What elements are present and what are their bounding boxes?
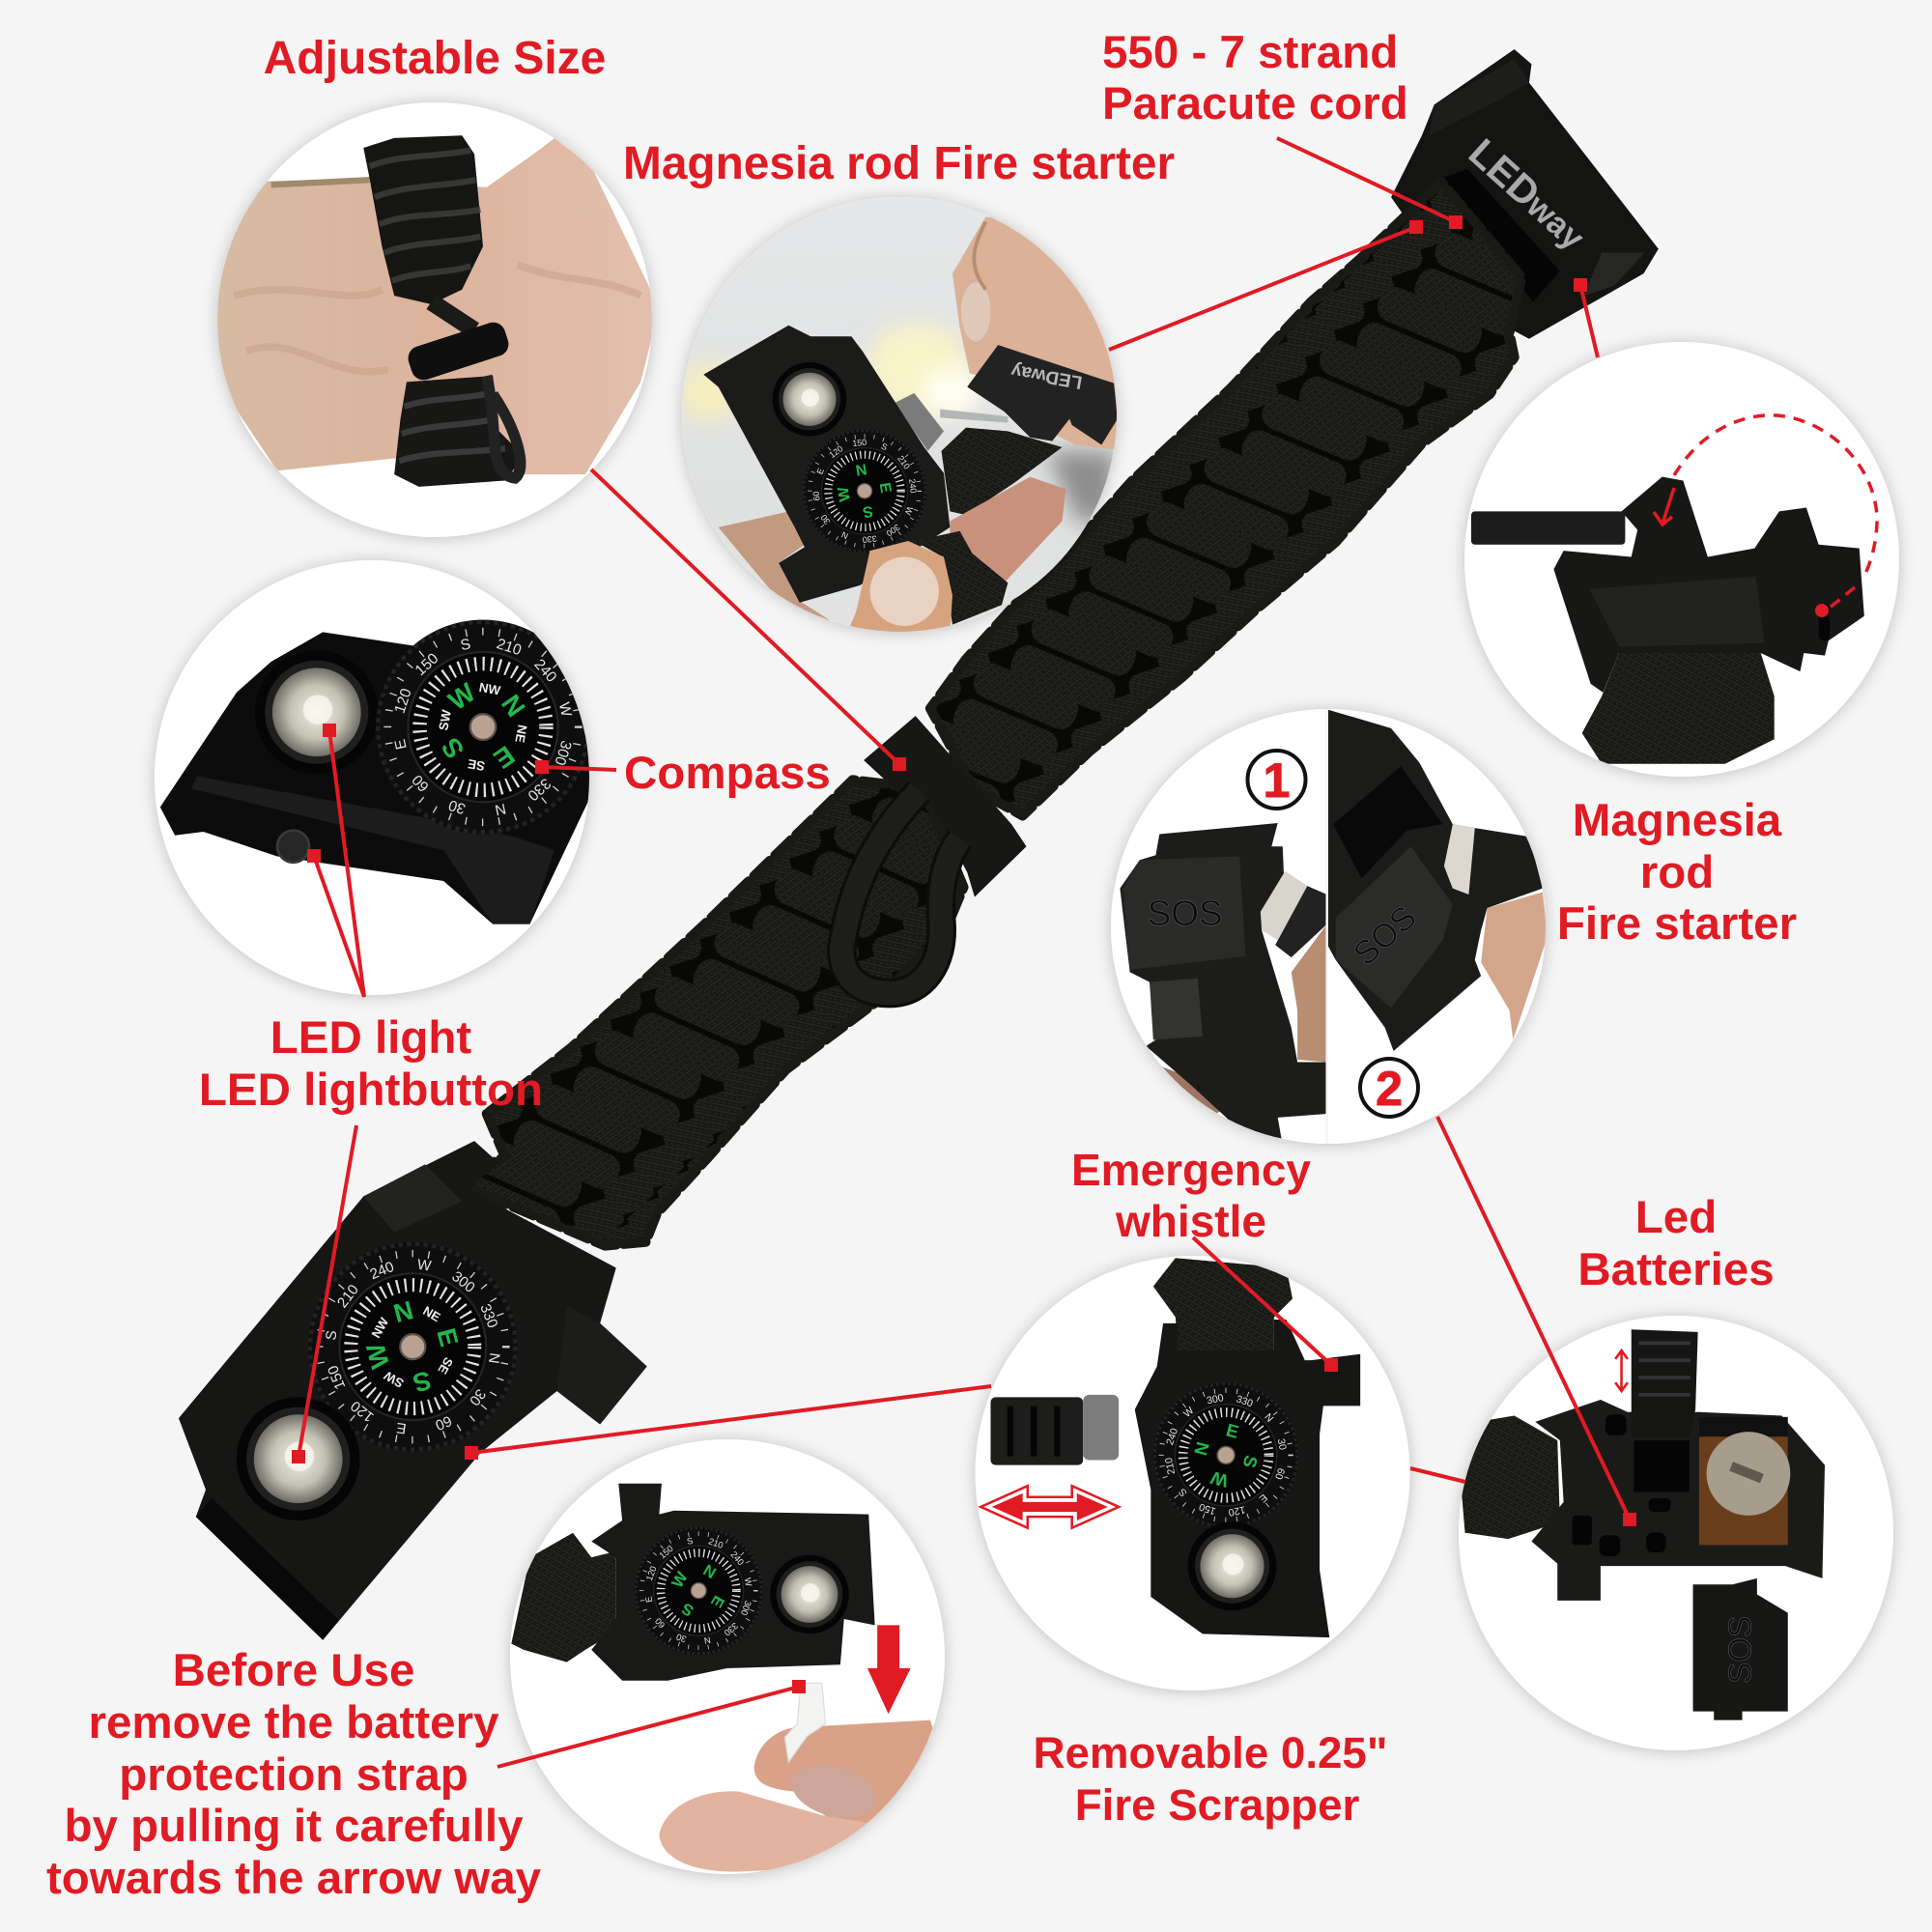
label: LED light: LED light bbox=[270, 1012, 471, 1064]
compass: E bbox=[643, 1596, 654, 1604]
panel: fire starter in use: S bbox=[880, 441, 889, 452]
leader: top buckle to fire starter panel bbox=[1574, 278, 1598, 357]
device body bbox=[591, 1484, 875, 1681]
label: emergency whistle: whistle bbox=[1115, 1196, 1266, 1246]
label: before use instructions: by pulling it carefully bbox=[64, 1801, 524, 1852]
label: before use instructions: protection strap bbox=[119, 1749, 469, 1801]
compass: 30 bbox=[675, 1632, 688, 1644]
label: adjustable size: Adjustable Size bbox=[264, 33, 606, 84]
leader: adjustable size to clasp bbox=[591, 469, 906, 771]
protection strap bbox=[784, 1683, 826, 1762]
label: magnesia rod fire starter (right): rod bbox=[1640, 847, 1714, 898]
panel: fire starter in use: E bbox=[876, 481, 894, 495]
compass: 210 bbox=[334, 1282, 362, 1311]
compass: NE bbox=[512, 724, 529, 744]
label: magnesia rod fire starter (right): Fire starter bbox=[1557, 898, 1797, 950]
leader: SOS panel to battery panel bbox=[1437, 1117, 1636, 1526]
compass: 300 bbox=[1206, 1392, 1225, 1406]
cord bbox=[1582, 653, 1775, 764]
mounting holes bbox=[1573, 1414, 1671, 1556]
compass: S bbox=[1177, 1486, 1190, 1498]
divider bbox=[1325, 702, 1328, 1146]
connector between panels bbox=[1410, 1468, 1465, 1482]
compass: W bbox=[743, 1577, 753, 1587]
panel: fire starter in use: 120 bbox=[828, 443, 844, 460]
wrist and hand bbox=[210, 138, 659, 474]
leader: paracord strand bbox=[1277, 138, 1463, 229]
upper fingers bbox=[952, 216, 1127, 451]
step 1 device bbox=[1120, 823, 1327, 1139]
compass: 120 bbox=[1227, 1503, 1246, 1519]
red vertical arrow bbox=[1615, 1350, 1628, 1391]
panel: magnesia rod fire starter bbox=[1464, 342, 1899, 777]
compass: N bbox=[485, 1351, 502, 1365]
compass: 240 bbox=[530, 656, 560, 686]
device body bbox=[1553, 477, 1864, 693]
step 2 hand bbox=[1481, 892, 1548, 1040]
panel: fire starter in use: 300 bbox=[885, 522, 901, 538]
compass: 240 bbox=[368, 1259, 396, 1283]
compass: 60 bbox=[653, 1616, 667, 1630]
cord bbox=[1462, 1416, 1560, 1539]
red down arrow bbox=[867, 1625, 911, 1714]
compass: E bbox=[707, 1593, 728, 1611]
label: compass: Compass bbox=[624, 748, 831, 799]
compass: E bbox=[395, 1419, 408, 1436]
grey knob bbox=[895, 393, 944, 451]
step 1 hand bbox=[1292, 924, 1327, 1062]
removable scrapper bbox=[991, 1395, 1119, 1465]
compass bbox=[308, 1242, 518, 1452]
device body bbox=[1531, 1400, 1825, 1601]
compass: N bbox=[1190, 1439, 1213, 1458]
step 2 device bbox=[1328, 710, 1543, 1051]
badge: step 1 bbox=[1248, 751, 1306, 809]
panel: fire starter in use: N bbox=[840, 529, 850, 541]
device bbox=[703, 326, 950, 603]
leader: LED on compass buckle bbox=[292, 1125, 356, 1463]
compass: W bbox=[416, 1257, 433, 1275]
compass: 120 bbox=[644, 1565, 659, 1582]
panel: LED light and compass close-up bbox=[155, 560, 592, 995]
compass: W bbox=[359, 1340, 395, 1372]
LED lens bbox=[265, 661, 369, 763]
compass: 330 bbox=[1235, 1393, 1255, 1409]
power button bbox=[277, 831, 309, 863]
compass: 300 bbox=[739, 1600, 753, 1616]
panel: fire starter in use: W bbox=[835, 485, 854, 502]
device body bbox=[1135, 1320, 1360, 1637]
compass: W bbox=[668, 1568, 692, 1591]
compass: N bbox=[1262, 1411, 1275, 1425]
striker: LEDway bbox=[1009, 359, 1084, 392]
compass: 300 bbox=[551, 738, 574, 768]
top buckle with LEDway logo bbox=[1391, 49, 1659, 339]
compass: N bbox=[700, 1561, 720, 1582]
compass: N bbox=[390, 1294, 416, 1328]
sparks bbox=[676, 362, 741, 421]
compass: NW bbox=[368, 1315, 392, 1341]
compass: 210 bbox=[495, 636, 524, 659]
label: paracord: Paracute cord bbox=[1102, 78, 1408, 129]
compass: S bbox=[678, 1599, 696, 1620]
label: LED light: LED lightbutton bbox=[199, 1065, 543, 1116]
compass: E bbox=[489, 740, 520, 775]
panel: fire starter in use: W bbox=[902, 505, 915, 517]
red double arrow bbox=[980, 1486, 1119, 1528]
battery compartment bbox=[1699, 1417, 1790, 1545]
SOS cover: SOS bbox=[1722, 1616, 1758, 1684]
label: paracord: 550 - 7 strand bbox=[1102, 27, 1398, 78]
label: removable fire scrapper: Fire Scrapper bbox=[1075, 1780, 1359, 1830]
lower cord bbox=[914, 531, 1008, 625]
LED bbox=[770, 1555, 849, 1634]
compass: E bbox=[431, 1325, 465, 1350]
rod bbox=[1471, 511, 1625, 545]
compass: 120 bbox=[348, 1397, 377, 1425]
compass: SW bbox=[381, 1368, 407, 1391]
upper cord section bbox=[930, 183, 1521, 815]
compass bbox=[1138, 1367, 1314, 1544]
compass: 210 bbox=[707, 1536, 724, 1550]
label: before use instructions: Before Use bbox=[173, 1645, 414, 1696]
panel: fire starter in use: S bbox=[862, 502, 874, 520]
compass: 30 bbox=[466, 1385, 489, 1408]
compass: 120 bbox=[392, 686, 415, 716]
compass: 240 bbox=[728, 1549, 746, 1567]
compass: S bbox=[459, 636, 472, 654]
panel: fire starter in use: N bbox=[855, 462, 868, 480]
leader: magnesia rod to cord bbox=[1109, 220, 1423, 350]
compass: S bbox=[686, 1536, 694, 1547]
compass: 30 bbox=[1275, 1437, 1289, 1451]
SOS cover bbox=[1693, 1578, 1788, 1720]
panel: fire starter in use bbox=[676, 197, 1127, 635]
panel: SOS whistle cover steps bbox=[1111, 702, 1548, 1146]
compass: S bbox=[436, 732, 470, 764]
compass: E bbox=[1224, 1419, 1241, 1442]
compass: 330 bbox=[476, 1301, 500, 1330]
compass: 150 bbox=[325, 1363, 349, 1392]
step 1 device: SOS bbox=[1148, 894, 1223, 933]
compass: E bbox=[1257, 1492, 1269, 1504]
compass: 60 bbox=[433, 1412, 454, 1434]
panel: fire starter in use: 330 bbox=[862, 533, 877, 545]
shadow under striker bbox=[1046, 451, 1115, 524]
dashed rotation arrow bbox=[1654, 415, 1877, 617]
compass: N bbox=[703, 1634, 711, 1645]
compass: 60 bbox=[409, 771, 433, 795]
label: LED batteries: Led bbox=[1635, 1192, 1717, 1243]
leader: buckle to scrapper panel bbox=[465, 1386, 991, 1460]
panel: fire starter in use: 240 bbox=[907, 478, 919, 494]
compass: SE bbox=[435, 1354, 456, 1377]
compass: NW bbox=[478, 680, 502, 698]
main paracord bracelet bbox=[179, 49, 1659, 1640]
badge: step 2 bbox=[1360, 1059, 1418, 1117]
cord bbox=[511, 1533, 616, 1662]
lower finger bbox=[950, 477, 1065, 582]
compass: S bbox=[410, 1365, 435, 1399]
compass: 240 bbox=[1164, 1427, 1180, 1447]
compass buckle body bbox=[179, 1141, 647, 1640]
compass: SE bbox=[467, 756, 486, 774]
compass bbox=[374, 618, 592, 836]
compass: W bbox=[1181, 1405, 1196, 1420]
sliding scrapper bbox=[1632, 1329, 1698, 1436]
lower cord section bbox=[469, 780, 963, 1246]
panel: LED batteries compartment bbox=[1459, 1316, 1893, 1750]
panel: fire starter in use: 210 bbox=[895, 454, 912, 471]
compass: 150 bbox=[1198, 1500, 1217, 1517]
label: removable fire scrapper: Removable 0.25" bbox=[1033, 1728, 1388, 1777]
badge: step 1: 1 bbox=[1264, 753, 1290, 808]
compass: N bbox=[496, 689, 531, 723]
fingers bbox=[659, 1791, 899, 1872]
leader: LED light and button bbox=[307, 724, 364, 997]
middle buckle and cord loop bbox=[841, 716, 1026, 993]
panel: battery protection strap bbox=[510, 1439, 945, 1874]
leader: battery strap bbox=[497, 1680, 806, 1767]
LED bbox=[1188, 1521, 1276, 1610]
step 2 device: SOS bbox=[1347, 898, 1424, 973]
compass: W bbox=[442, 676, 481, 716]
compass: W bbox=[555, 701, 575, 719]
panel: adjustable size on wrist bbox=[210, 102, 659, 537]
label: magnesia rod fire starter: Magnesia rod Fire starter bbox=[623, 138, 1175, 189]
label: magnesia rod fire starter (right): Magnesia bbox=[1573, 795, 1782, 846]
label: LED batteries: Batteries bbox=[1577, 1244, 1775, 1295]
compass: 300 bbox=[448, 1268, 478, 1296]
compass: S bbox=[323, 1329, 341, 1342]
thumb bbox=[846, 541, 952, 635]
compass: 30 bbox=[446, 796, 468, 817]
compass: N bbox=[494, 800, 507, 818]
panel: fire starter in use: 30 bbox=[818, 513, 832, 526]
label: before use instructions: towards the arrow way bbox=[46, 1853, 542, 1904]
compass: 210 bbox=[1163, 1457, 1178, 1475]
device body bbox=[160, 632, 591, 924]
striker bbox=[940, 345, 1118, 444]
badge: step 2: 2 bbox=[1376, 1062, 1403, 1116]
panel: removable fire scrapper and whistle bbox=[976, 1256, 1410, 1690]
label: before use instructions: remove the battery bbox=[88, 1697, 499, 1748]
leader: compass bbox=[535, 760, 616, 774]
bracelet upper band bbox=[363, 135, 483, 304]
compass: 330 bbox=[723, 1621, 740, 1637]
compass: 150 bbox=[658, 1544, 675, 1561]
compass: E bbox=[392, 738, 411, 751]
cord bbox=[1153, 1258, 1293, 1350]
top buckle with LEDway logo: LEDway bbox=[1461, 129, 1596, 258]
leader: emergency whistle bbox=[1193, 1237, 1338, 1372]
compass: S bbox=[1239, 1453, 1262, 1470]
compass: 150 bbox=[412, 650, 442, 679]
compass: SW bbox=[436, 708, 454, 731]
panel: fire starter in use: 60 bbox=[811, 491, 822, 501]
compass bbox=[635, 1526, 763, 1655]
panel: fire starter in use: E bbox=[814, 467, 826, 476]
label: emergency whistle: Emergency bbox=[1071, 1145, 1311, 1195]
bracelet clasp bbox=[408, 323, 508, 381]
panel: fire starter in use: 150 bbox=[852, 438, 867, 448]
compass: 60 bbox=[1272, 1466, 1287, 1481]
compass: 330 bbox=[524, 775, 554, 804]
left hand bbox=[719, 512, 831, 620]
bracelet lower band bbox=[394, 376, 524, 487]
compass: NE bbox=[420, 1303, 443, 1324]
LED lens bbox=[237, 1397, 359, 1520]
cord bbox=[941, 428, 1062, 515]
compass: W bbox=[1208, 1467, 1231, 1492]
